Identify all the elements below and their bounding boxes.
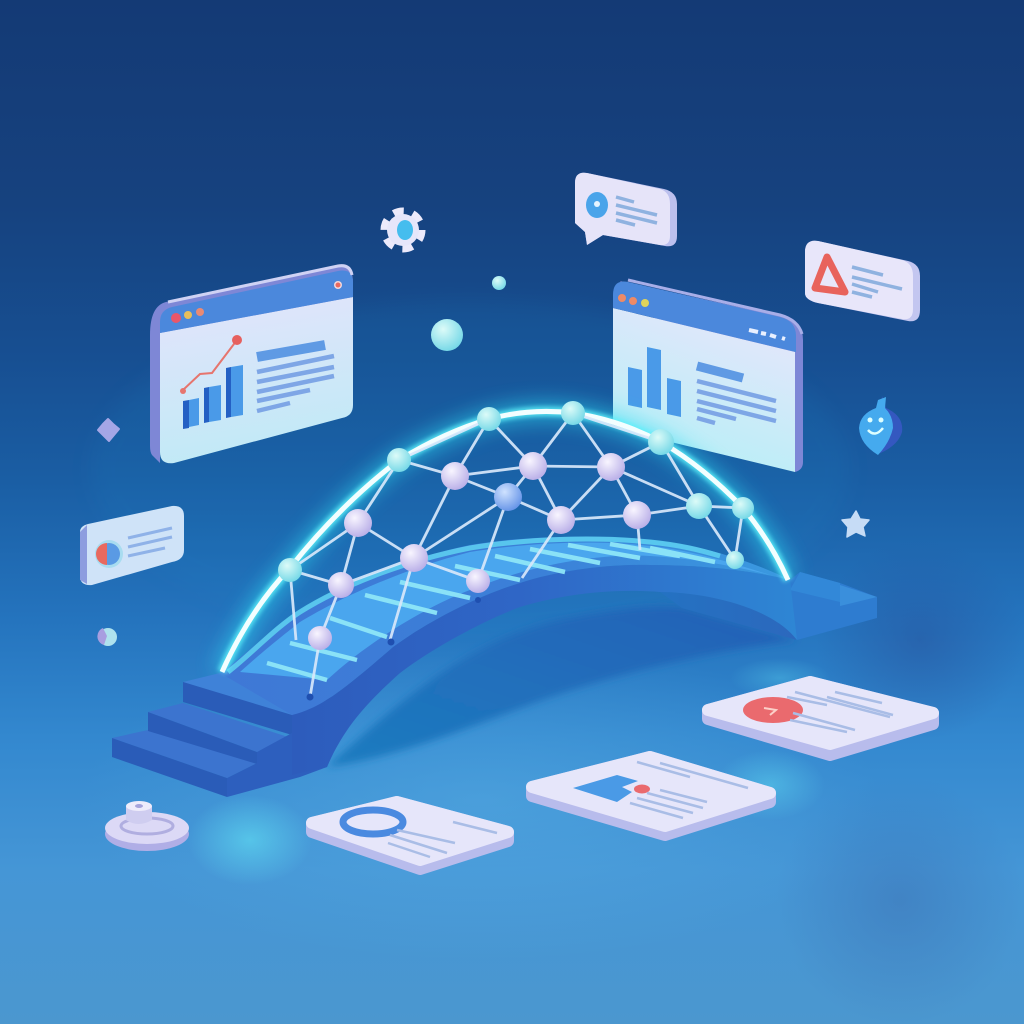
right stairs [770, 572, 877, 640]
network edges [290, 413, 743, 697]
bridge [112, 401, 877, 797]
icon: tiny cube [492, 276, 506, 290]
deck back rim [228, 539, 720, 672]
icon: left gem top [98, 419, 119, 441]
floor glow spots [188, 658, 830, 885]
arch hoop [222, 411, 788, 672]
callout: left small card [80, 506, 184, 585]
deck inner panel [240, 543, 770, 680]
panel: floor card right [708, 682, 933, 755]
icon: blue pin [859, 396, 902, 455]
icon: floor dial [105, 801, 189, 851]
panel: floor card center [532, 757, 770, 835]
callout: top right warning card [805, 241, 920, 321]
icon: star [842, 511, 869, 537]
bar chart [628, 347, 681, 417]
deck side face [292, 565, 797, 775]
stairs [112, 673, 340, 797]
text lines [697, 366, 776, 423]
arch back glow [222, 411, 788, 672]
panel: floor card left [312, 802, 508, 869]
callout: top speech card [575, 173, 677, 246]
panel: right browser window [613, 280, 803, 472]
icon: small sphere [431, 319, 463, 351]
bar chart [183, 365, 243, 429]
network nodes [278, 401, 754, 650]
deck slats [267, 544, 715, 680]
icon: gear [385, 212, 421, 248]
bridge underside [660, 592, 797, 640]
deck top surface [220, 537, 790, 715]
text lines [257, 345, 334, 411]
icon: left gem bottom [97, 628, 117, 646]
anchor dots [306, 597, 481, 700]
trend line [180, 335, 242, 394]
panel: left browser window [150, 266, 353, 463]
bridge shadow on floor [327, 607, 797, 767]
